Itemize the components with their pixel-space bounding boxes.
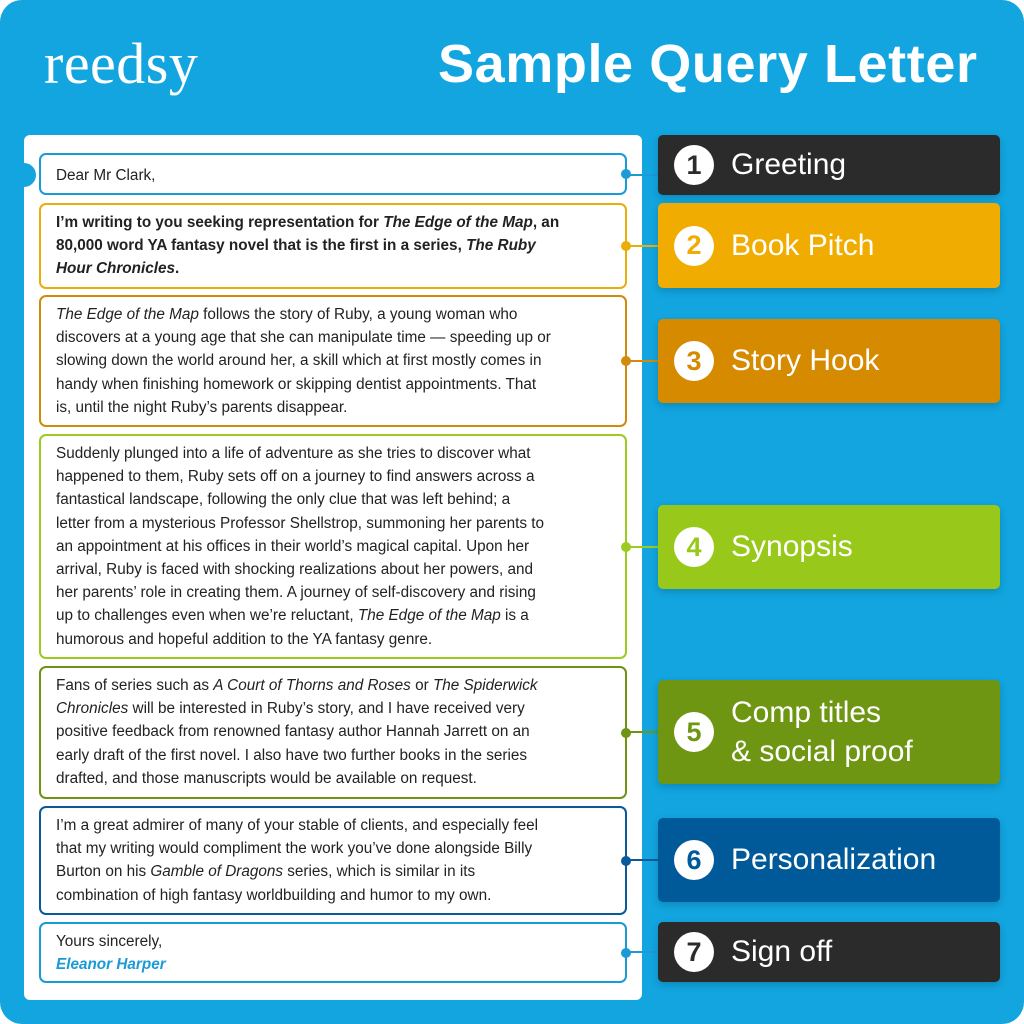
label 1: Greeting: Greeting xyxy=(731,148,846,181)
box 6: personalization text: combination of high fantasy worldbuilding and humor to my own. xyxy=(56,887,491,904)
box 3: story hook text: discovers at a young age that she can manipulate time — speeding up or xyxy=(56,329,551,346)
label 5: Comp titles: 5 xyxy=(686,716,702,746)
box 5: comp titles text: Chronicles will be interested in Ruby’s story, and I have received very xyxy=(56,700,525,717)
label 5: Comp titles: & social proof xyxy=(731,735,913,768)
box 5: comp titles text xyxy=(39,666,627,799)
box 3: story hook text: The Edge of the Map follows the story of Ruby, a young woman who xyxy=(56,306,517,323)
box 6: personalization text: Burton on his Gamble of Dragons series, which is similar in its xyxy=(56,863,475,880)
label 1: Greeting xyxy=(658,135,1000,195)
box 4: synopsis text: an appointment at his offices in their world’s magical capital. Upon her xyxy=(56,538,529,555)
box 4: synopsis text: up to challenges even when we’re reluctant, The Edge of the Map is a xyxy=(56,607,529,624)
label 4: Synopsis: Synopsis xyxy=(731,530,853,563)
label 5: Comp titles: Comp titles xyxy=(731,696,881,729)
box 4: synopsis text xyxy=(39,434,627,659)
box 4: synopsis text: arrival, Ruby is faced with shocking realizations about her powers, and xyxy=(56,561,533,578)
box 3: story hook text: slowing down the world around her, a skill which at first mostly comes in xyxy=(56,352,541,369)
box 4: synopsis text: humorous and hopeful addition to the YA fantasy genre. xyxy=(56,631,432,648)
box 2: book pitch text: 80,000 word YA fantasy novel that is the first in a series, The Ruby xyxy=(56,237,536,254)
label 3: Story Hook: Story Hook xyxy=(731,344,879,377)
box 6: personalization text xyxy=(39,806,627,915)
box 7: sign off text: Eleanor Harper xyxy=(56,956,166,973)
label 7: Sign off: Sign off xyxy=(731,935,832,968)
label 6: Personalization: Personalization xyxy=(731,843,936,876)
box 3: story hook text: is, until the night Ruby’s parents disappear. xyxy=(56,399,347,416)
label 7: Sign off: 7 xyxy=(686,936,702,966)
label 2: Book Pitch xyxy=(658,203,1000,288)
label 3: Story Hook xyxy=(658,319,1000,403)
label 5: Comp titles xyxy=(658,680,1000,784)
logo: reedsy xyxy=(44,31,198,96)
label 6: Personalization xyxy=(658,818,1000,902)
box 5: comp titles text: positive feedback from renowned fantasy author Hannah Jarrett on an xyxy=(56,723,530,740)
box 5: comp titles text: early draft of the first novel. I also have two further books in the series xyxy=(56,747,527,764)
box 2: book pitch text: I’m writing to you seeking representation for The Edge of the Map, an xyxy=(56,214,559,231)
box 6: personalization text: I’m a great admirer of many of your stable of clients, and especially feel xyxy=(56,817,538,834)
box 4: synopsis text: her parents’ role in creating them. A journey of self-discovery and rising xyxy=(56,584,536,601)
box 4: synopsis text: happened to them, Ruby sets off on a journey to find answers across a xyxy=(56,468,534,485)
box 1: greeting text: Dear Mr Clark, xyxy=(56,167,155,184)
label 2: Book Pitch: 2 xyxy=(686,230,702,260)
box 3: story hook text: handy when finishing homework or skipping dentist appointments. That xyxy=(56,376,536,393)
label 1: Greeting: 1 xyxy=(686,150,702,180)
box 5: comp titles text: drafted, and those manuscripts would be available on request. xyxy=(56,770,477,787)
box 6: personalization text: that my writing would compliment the work you’ve done alongside Billy xyxy=(56,840,532,857)
label 4: Synopsis: 4 xyxy=(686,532,702,562)
box 5: comp titles text: Fans of series such as A Court of Thorns and Roses or The Spiderwick xyxy=(56,677,538,694)
label 3: Story Hook: 3 xyxy=(686,346,702,376)
box 3: story hook text xyxy=(39,295,627,427)
title: Sample Query Letter xyxy=(438,34,978,94)
label 2: Book Pitch: Book Pitch xyxy=(731,228,874,262)
label 4: Synopsis xyxy=(658,505,1000,589)
label 6: Personalization: 6 xyxy=(686,844,702,874)
box 7: sign off text xyxy=(39,922,627,983)
letter card xyxy=(24,135,642,1000)
box 1: greeting text xyxy=(39,153,627,195)
box 2: book pitch text: Hour Chronicles. xyxy=(56,260,179,277)
label 7: Sign off xyxy=(658,922,1000,982)
box 2: book pitch text xyxy=(39,203,627,289)
box 4: synopsis text: letter from a mysterious Professor Shellstrop, summoning her parents to xyxy=(56,515,544,532)
box 4: synopsis text: fantastical landscape, following the only clue that was left behind; a xyxy=(56,491,510,508)
box 7: sign off text: Yours sincerely, xyxy=(56,933,162,950)
box 4: synopsis text: Suddenly plunged into a life of adventure as she tries to discover what xyxy=(56,445,530,462)
